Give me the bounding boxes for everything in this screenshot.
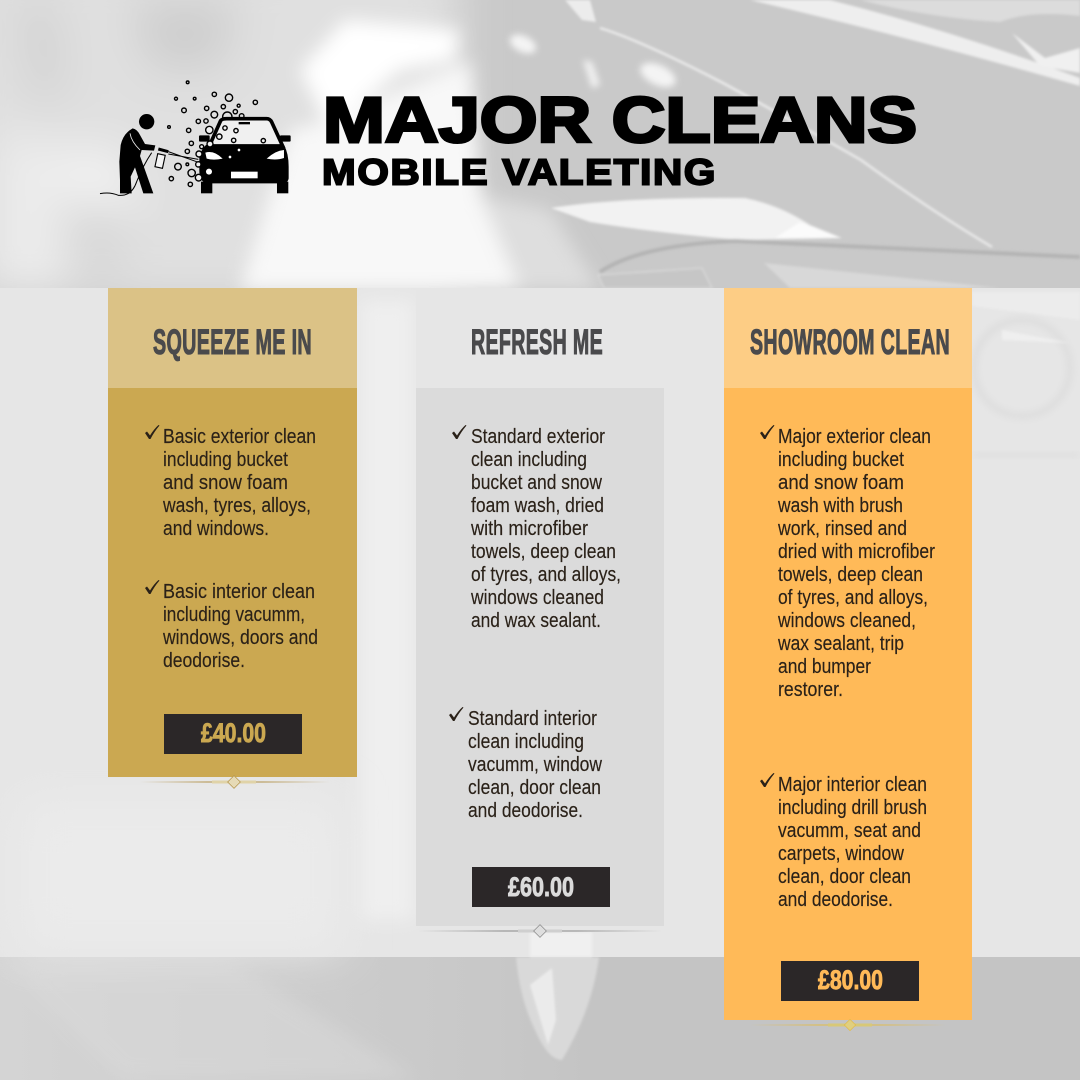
- exterior clean item: dried with microfiber: [778, 540, 935, 563]
- interior clean item: and deodorise.: [778, 888, 893, 911]
- exterior clean item: Major exterior clean: [778, 425, 931, 448]
- panel header: Refresh Me: [416, 288, 664, 388]
- panel header: Squeeze Me In: SQUEEZE ME IN: [153, 323, 312, 362]
- exterior clean item: towels, deep clean: [778, 563, 923, 586]
- exterior clean item: bucket and snow: [471, 471, 602, 494]
- ornament: Showroom Clean: [750, 1019, 946, 1031]
- panel header: Showroom Clean: [724, 288, 972, 388]
- exterior clean item: and windows.: [163, 517, 269, 540]
- interior clean item: clean, door clean: [468, 776, 601, 799]
- interior clean item: [760, 773, 927, 911]
- ornament: Refresh Me: [418, 925, 662, 937]
- icon: car: [195, 119, 291, 193]
- price: £60.00: £60.00: [508, 872, 574, 902]
- title: MAJOR CLEANS: [323, 84, 917, 156]
- panel header: Squeeze Me In: [108, 288, 357, 388]
- interior clean item: including drill brush: [778, 796, 927, 819]
- panel body: Refresh Me: [416, 388, 664, 926]
- panel body: Squeeze Me In: [108, 388, 357, 777]
- price: £40.00: [164, 714, 302, 754]
- interior clean item: Standard interior: [468, 707, 597, 730]
- exterior clean item: windows cleaned,: [777, 609, 916, 632]
- lower background band: [0, 957, 1080, 1080]
- price: £80.00: £80.00: [818, 965, 883, 995]
- interior clean item: carpets, window: [778, 842, 904, 865]
- price: £60.00: [472, 867, 610, 907]
- exterior clean item: including bucket: [163, 448, 288, 471]
- logo icon: person pressure washing a car with bubbles: [100, 81, 291, 195]
- exterior clean item: Basic exterior clean: [163, 425, 316, 448]
- exterior clean item: and bumper: [778, 655, 871, 678]
- icon: bubbles: [168, 81, 257, 186]
- interior clean item: and deodorise.: [468, 799, 583, 822]
- interior clean item: including vacumm,: [163, 603, 305, 626]
- exterior clean item: foam wash, dried: [471, 494, 604, 517]
- exterior clean item: [145, 425, 316, 540]
- panel: Refresh Me: [416, 288, 664, 926]
- interior clean item: clean, door clean: [778, 865, 911, 888]
- exterior clean item: of tyres, and alloys,: [471, 563, 621, 586]
- interior clean item: [449, 707, 602, 822]
- interior clean item: windows, doors and: [162, 626, 318, 649]
- interior clean item: [145, 580, 318, 672]
- exterior clean item: clean including: [471, 448, 587, 471]
- exterior clean item: [760, 425, 935, 701]
- interior clean item: Major interior clean: [778, 773, 927, 796]
- exterior clean item: work, rinsed and: [777, 517, 907, 540]
- interior clean item: deodorise.: [163, 649, 245, 672]
- exterior clean item: restorer.: [778, 678, 843, 701]
- panel: Squeeze Me In: [108, 288, 357, 777]
- exterior clean item: with microfiber: [470, 517, 588, 540]
- exterior clean item: and snow foam: [163, 471, 288, 494]
- panel header: Refresh Me: REFRESH ME: [471, 323, 603, 362]
- price: £80.00: [781, 961, 919, 1001]
- exterior clean item: of tyres, and alloys,: [778, 586, 928, 609]
- ornament: Squeeze Me In: [140, 776, 330, 788]
- exterior clean item: wax sealant, trip: [777, 632, 904, 655]
- exterior clean item: towels, deep clean: [471, 540, 616, 563]
- price: £40.00: £40.00: [201, 718, 266, 748]
- exterior clean item: wash, tyres, alloys,: [162, 494, 311, 517]
- interior clean item: Basic interior clean: [163, 580, 315, 603]
- exterior clean item: wash with brush: [777, 494, 903, 517]
- panel: Showroom Clean: [724, 288, 972, 1020]
- middle translucent band: [0, 288, 1080, 957]
- exterior clean item: and snow foam: [778, 471, 904, 494]
- interior clean item: vacumm, seat and: [778, 819, 921, 842]
- exterior clean item: windows cleaned: [470, 586, 604, 609]
- interior clean item: vacumm, window: [468, 753, 602, 776]
- interior clean item: clean including: [468, 730, 584, 753]
- subtitle: MOBILE VALETING: [322, 152, 717, 192]
- exterior clean item: [452, 425, 621, 632]
- exterior clean item: Standard exterior: [471, 425, 605, 448]
- exterior clean item: including bucket: [778, 448, 904, 471]
- panel body: Showroom Clean: [724, 388, 972, 1020]
- icon: person: [100, 114, 198, 195]
- exterior clean item: and wax sealant.: [471, 609, 601, 632]
